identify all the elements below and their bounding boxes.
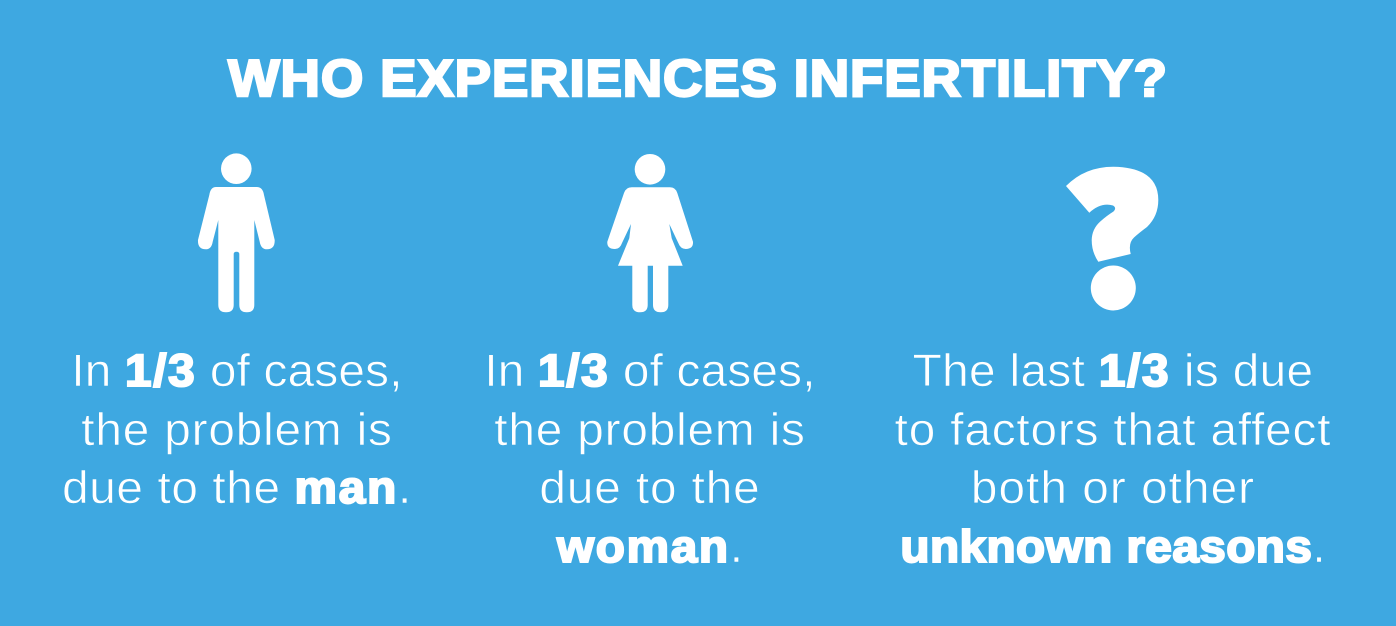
text: unknown caption: both or other xyxy=(971,462,1255,513)
text: unknown caption: The last 1/3 is due xyxy=(913,345,1313,396)
text: woman caption: due to the xyxy=(539,462,761,513)
text: woman caption: In 1/3 of cases, xyxy=(484,345,816,396)
text: unknown caption xyxy=(895,345,1331,572)
text: unknown caption: unknown reasons. xyxy=(900,520,1326,572)
text: man caption xyxy=(62,345,412,513)
text: man caption: In 1/3 of cases, xyxy=(71,345,403,396)
text: man caption: the problem is xyxy=(81,404,393,454)
text: woman caption: the problem is xyxy=(494,404,806,454)
title: WHO EXPERIENCES INFERTILITY? xyxy=(228,50,1168,108)
text: woman caption xyxy=(484,345,816,572)
icon: woman xyxy=(607,154,693,312)
text: woman caption: woman. xyxy=(557,520,743,572)
icon: man xyxy=(198,153,275,312)
text: unknown caption: to factors that affect xyxy=(895,404,1331,454)
text: man caption: due to the man. xyxy=(62,462,412,513)
icon: question mark xyxy=(1066,166,1158,310)
